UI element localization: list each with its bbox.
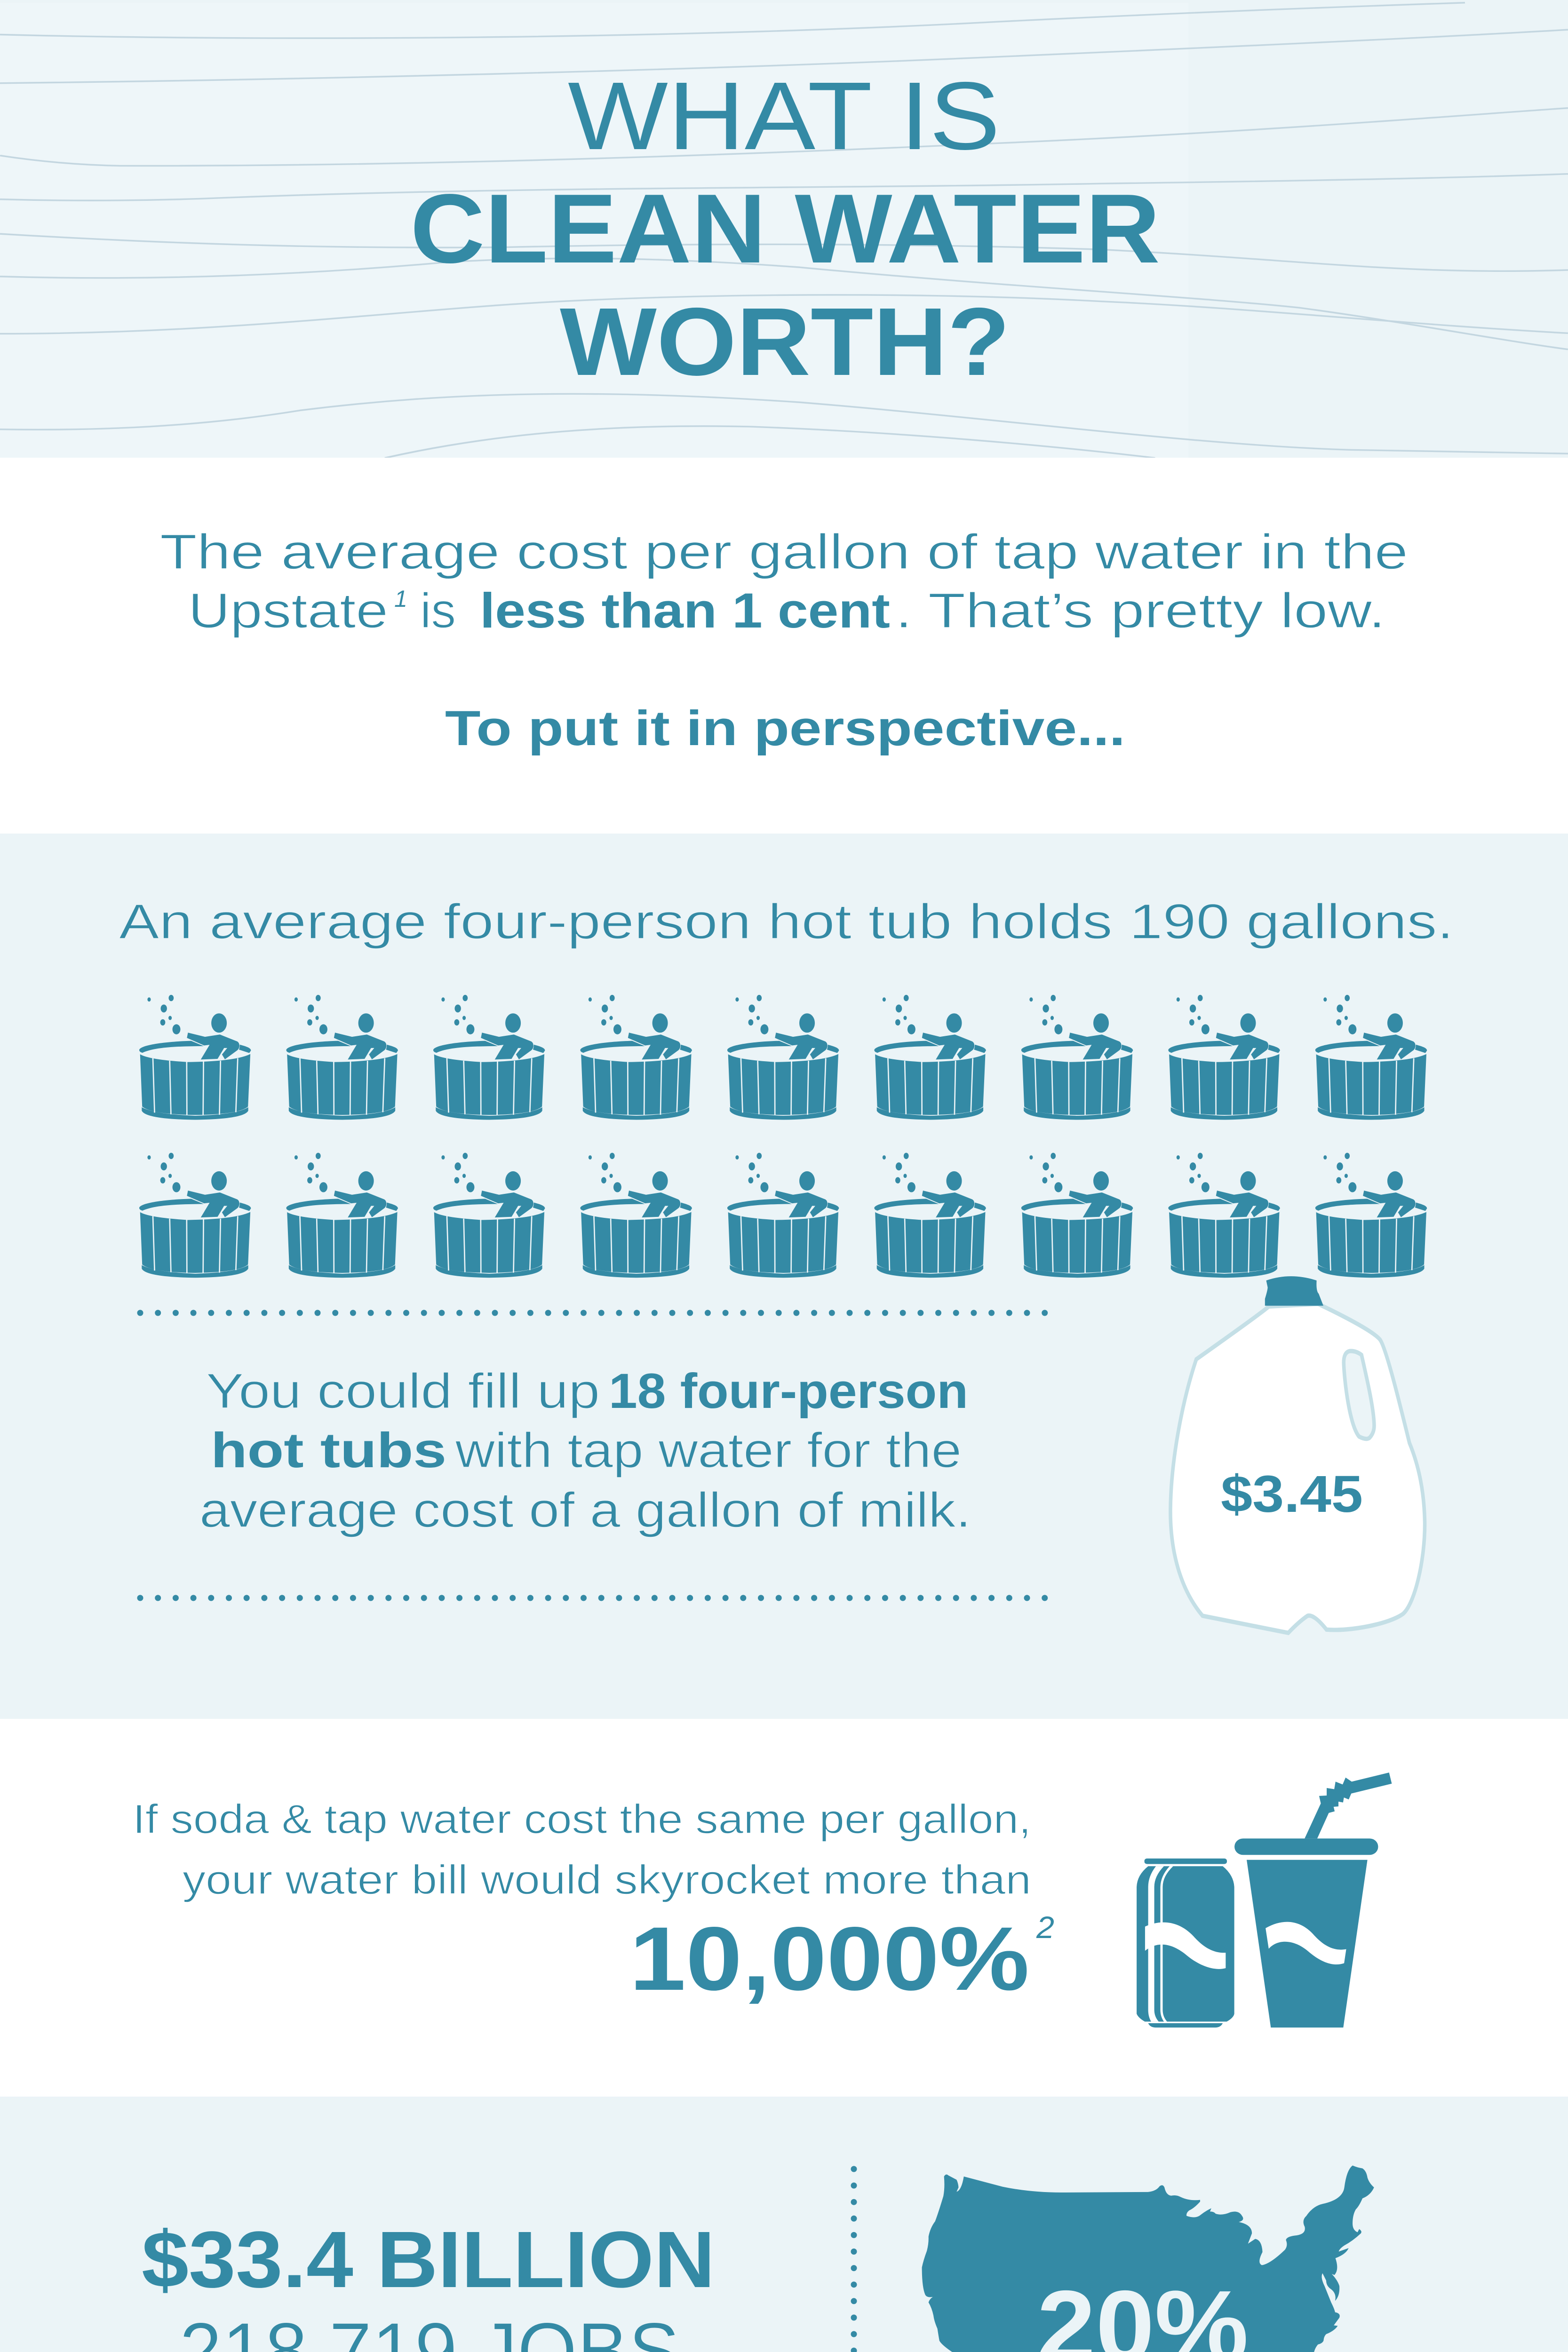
title: CLEAN WATER: [410, 174, 1160, 284]
map: united states 20 percent: [922, 2166, 1374, 2352]
text block: milk comparison: You could fill up: [206, 1364, 600, 1419]
text block: average cost: . That’s pretty low.: [895, 583, 1385, 638]
title: [410, 62, 1160, 396]
text block: average cost: Upstate: [188, 583, 388, 638]
panel: intro: [0, 458, 1568, 834]
title: WORTH?: [560, 288, 1010, 396]
icon: milk jug: [1170, 1276, 1425, 1633]
text block: milk comparison: [199, 1364, 971, 1538]
icon grid: 18 hot tubs: [139, 995, 1427, 1278]
text block: milk comparison: average cost of a gallon of milk.: [199, 1483, 971, 1538]
text block: average cost: is: [420, 583, 456, 638]
panel: hot tubs and milk: [0, 834, 1568, 1719]
text block: average cost: less than 1 cent: [480, 583, 890, 638]
text block: soda cost: [133, 1796, 1054, 2009]
text block: average cost: [160, 524, 1408, 638]
heading: hot tub capacity: An average four-person hot tub holds 190 gallons.: [119, 894, 1454, 949]
panel: title header: [0, 0, 1568, 458]
text block: average cost: The average cost per gallon of tap water in the: [160, 524, 1408, 580]
text block: soda cost: 2: [1036, 1910, 1054, 1945]
stat: 33.4 billion and jobs: [142, 2215, 715, 2352]
title: WHAT IS: [568, 62, 1000, 170]
stat: 33.4 billion and jobs: $33.4 BILLION: [142, 2215, 715, 2304]
panel: soda comparison: [0, 1719, 1568, 2097]
icon: soda can and cup: [1137, 1772, 1392, 2027]
text block: milk comparison: with tap water for the: [455, 1423, 962, 1478]
panel: economy: [0, 2097, 1568, 2352]
subheading: To put it in perspective...: [445, 701, 1125, 756]
text block: milk comparison: hot tubs: [211, 1423, 446, 1478]
text block: soda cost: If soda & tap water cost the same per gallon,: [133, 1796, 1031, 1842]
text block: average cost: 1: [394, 586, 407, 612]
text block: soda cost: 10,000%: [629, 1908, 1029, 2009]
icon: milk jug: $3.45: [1221, 1465, 1363, 1523]
text block: soda cost: your water bill would skyrocket more than: [183, 1857, 1031, 1903]
text block: milk comparison: 18 four-person: [609, 1364, 968, 1419]
